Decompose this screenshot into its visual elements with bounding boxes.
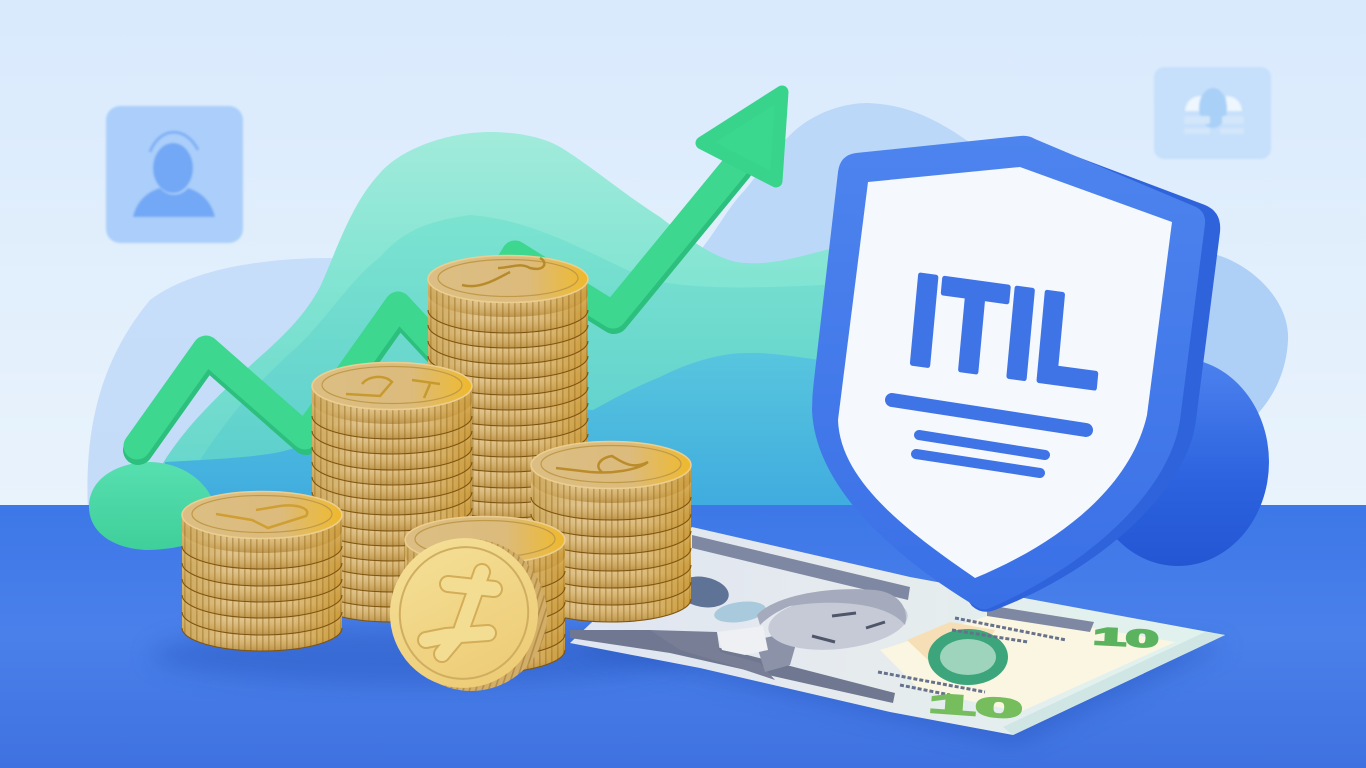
teal wave: upper layer — [150, 132, 900, 510]
right background blob — [1150, 253, 1288, 510]
cream tint — [880, 612, 1175, 712]
coin numeral one — [426, 572, 494, 654]
grey oval seal — [675, 573, 731, 611]
shield front rim — [812, 136, 1205, 609]
portrait — [650, 588, 910, 680]
growth arrow — [137, 92, 782, 450]
shield title: ITIL — [902, 248, 1109, 416]
background sky — [0, 0, 1366, 510]
coin stack: right — [531, 442, 691, 622]
top right dark strip — [987, 605, 1094, 632]
teal wave: middle layer — [170, 215, 900, 510]
coin mark — [462, 258, 544, 286]
arrow head — [702, 92, 782, 181]
right edge hatching — [1003, 632, 1225, 735]
coin stack: middle — [312, 362, 472, 622]
note paper — [570, 527, 1225, 735]
icon: person silhouette — [133, 132, 215, 217]
shadow under coins — [150, 625, 690, 685]
arrow shaft — [137, 164, 737, 446]
teal wave: lower layer — [160, 353, 900, 510]
peach tint — [907, 622, 995, 662]
top dark strip — [692, 535, 910, 600]
green mound — [89, 462, 217, 550]
coin mark — [556, 456, 648, 473]
coin stack: left — [182, 492, 342, 651]
coin rim — [375, 519, 567, 711]
arrow shaft shadow — [138, 168, 738, 450]
pale oval — [713, 598, 767, 626]
fine print — [878, 618, 1066, 695]
neck — [755, 630, 800, 672]
eyes and mouth — [812, 613, 885, 642]
coin mark — [346, 377, 440, 398]
face — [766, 588, 910, 656]
bottom dark strip — [570, 630, 895, 703]
shield white panel — [838, 167, 1172, 578]
shield lines — [892, 400, 1086, 473]
coat — [650, 630, 775, 680]
banknote — [570, 527, 1230, 745]
seal — [928, 629, 1008, 685]
hair — [757, 589, 906, 625]
floor — [0, 505, 1366, 768]
value 10 bottom: 10 — [928, 688, 1023, 725]
central pale blue hill behind arrow — [640, 103, 1100, 510]
shield — [812, 136, 1220, 612]
coin mark — [216, 505, 307, 528]
blue ball behind shield — [1087, 358, 1269, 566]
icon card: person — [106, 106, 243, 243]
note shadow — [575, 560, 1230, 745]
coin stack: tall back — [428, 256, 588, 550]
shield side depth — [960, 139, 1220, 612]
icon card: faded data icon — [1154, 67, 1271, 159]
coin face — [370, 519, 558, 707]
left background blob — [87, 258, 800, 510]
value 10 top right: 10 — [1093, 623, 1159, 653]
icon: dome and bars — [1184, 88, 1244, 134]
collar — [717, 626, 768, 655]
coin stack: front — [405, 516, 565, 673]
leaning coin — [370, 519, 567, 711]
